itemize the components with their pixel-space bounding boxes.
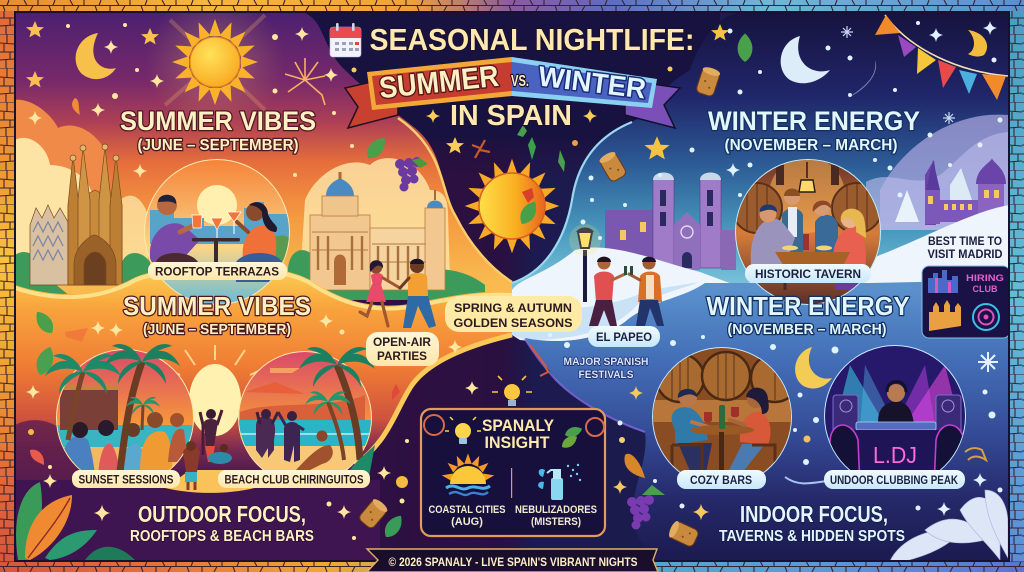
- label: undoor clubbing peak: [824, 470, 965, 489]
- sun: summer sky: [172, 19, 258, 105]
- label: beach club chiringuitos: [218, 470, 370, 488]
- text: best time to visit madrid: VISIT MADRID: [928, 249, 1002, 261]
- icon: insight bulb: [445, 417, 481, 444]
- big leaves: winter corner: [890, 490, 1008, 561]
- title: IN SPAIN: [450, 100, 572, 132]
- heading: summer vibes lower: (JUNE – SEPTEMBER): [143, 321, 291, 338]
- label: cozy bars: [677, 470, 766, 489]
- bunting: [875, 15, 1008, 100]
- snowflakes: [841, 26, 998, 372]
- lamp post: [569, 224, 601, 302]
- text: outdoor focus: [130, 501, 314, 545]
- moon: summer sky: [76, 33, 116, 79]
- label: spring and autumn golden seasons: GOLDEN SEASONS: [454, 318, 573, 330]
- landmark: Sagrada Familia: [30, 144, 122, 285]
- label: major spanish festivals: FESTIVALS: [578, 369, 634, 381]
- panel: summer upper sky: [15, 0, 512, 300]
- panel: summer lower area: [15, 265, 512, 561]
- text: indoor focus: [719, 501, 905, 545]
- central half-sun: [465, 159, 559, 253]
- heading: winter energy lower: (NOVEMBER – MARCH): [728, 321, 887, 338]
- grapes and leaf: summer: [363, 134, 428, 192]
- heading: winter energy top: [708, 106, 920, 154]
- text: indoor focus: TAVERNS & HIDDEN SPOTS: [719, 528, 905, 545]
- text: coastal cities: COASTAL CITIES: [428, 504, 506, 516]
- heading: winter energy top: WINTER ENERGY: [708, 106, 920, 136]
- title: [370, 22, 694, 132]
- label: major spanish festivals: [564, 356, 649, 381]
- panel: winter upper sky: [512, 13, 1010, 295]
- text: coastal cities: [428, 504, 506, 528]
- label: historic tavern: [745, 264, 871, 283]
- title: SEASONAL NIGHTLIFE:: [370, 22, 694, 57]
- fireworks: [285, 58, 325, 105]
- heading: winter energy lower: WINTER ENERGY: [706, 291, 910, 321]
- circle scene: indoor clubbing: [824, 345, 966, 470]
- text: indoor focus: INDOOR FOCUS,: [740, 501, 888, 527]
- label: spring and autumn golden seasons: [445, 296, 582, 332]
- divider line in box: [511, 468, 512, 498]
- text: best time to visit madrid: [928, 236, 1002, 261]
- palm trees: [45, 344, 375, 482]
- title sparkles: [352, 66, 672, 158]
- dancers: [360, 259, 436, 328]
- icon: sun over waves: [441, 453, 495, 495]
- circle scene: historic tavern: [732, 157, 882, 306]
- landmark: palace: [280, 172, 485, 300]
- label: rooftop terrazas: ROOFTOP TERRAZAS: [155, 266, 279, 278]
- icon: mister spray: [538, 464, 581, 500]
- heading: summer vibes top: (JUNE – SEPTEMBER): [138, 137, 298, 154]
- circle scene: rooftop terrazas: [144, 159, 295, 305]
- landmark: winter cathedral: [605, 172, 736, 270]
- label: spring and autumn golden seasons: SPRING & AUTUMN: [454, 303, 572, 315]
- calendar icon: [330, 23, 361, 57]
- label: el papeo: [588, 326, 660, 347]
- clouds: summer: [15, 100, 450, 280]
- label: open-air parties: OPEN-AIR: [373, 337, 432, 349]
- snow drifts: [512, 205, 1010, 342]
- bushes behind landmarks: [15, 250, 318, 296]
- label: sunset sessions: [72, 470, 180, 488]
- title: WINTER: [537, 61, 648, 105]
- heading: summer vibes lower: [123, 291, 311, 338]
- text: outdoor focus: ROOFTOPS & BEACH BARS: [130, 528, 314, 545]
- text: nebulizadores: NEBULIZADORES: [515, 504, 597, 516]
- heading: winter energy lower: [706, 291, 910, 338]
- panel: club card: HIRING: [966, 273, 1004, 284]
- decorations: lower summer: [26, 308, 479, 541]
- text: best time to visit madrid: BEST TIME TO: [928, 236, 1002, 248]
- heading: spanaly insight: [482, 417, 554, 452]
- heading: winter energy top: (NOVEMBER – MARCH): [724, 137, 898, 154]
- insight box: [421, 409, 605, 536]
- icon: light bulb above box: [492, 376, 532, 406]
- text: nebulizadores: (MISTERS): [531, 516, 581, 528]
- label: el papeo: EL PAPEO: [596, 332, 652, 344]
- text: outdoor focus: OUTDOOR FOCUS,: [138, 501, 306, 527]
- landmark: winter castle: [895, 158, 1006, 225]
- heading: summer vibes top: [120, 106, 316, 154]
- title: VS.: [511, 73, 529, 90]
- label: open-air parties: PARTIES: [377, 351, 427, 363]
- footer ribbon: [367, 549, 658, 572]
- label: beach club chiringuitos: BEACH CLUB CHIRINGUITOS: [224, 474, 364, 486]
- footer ribbon: © 2026 SPANALY - LIVE SPAIN'S VIBRANT NIGHTS: [388, 557, 638, 569]
- heading: summer vibes top: SUMMER VIBES: [120, 106, 316, 136]
- text: nebulizadores: [515, 504, 597, 528]
- circle scene: beach club chiringuitos: [238, 351, 372, 470]
- label: open-air parties: [366, 332, 439, 366]
- label: historic tavern: HISTORIC TAVERN: [755, 269, 861, 281]
- ribbon: summer: [345, 57, 512, 128]
- beach figures: [183, 409, 232, 490]
- circle scene: cozy bars: [652, 347, 792, 474]
- decorations: lower winter: [530, 333, 1002, 548]
- sky decorations: summer: [26, 21, 354, 178]
- panel: club card: CLUB: [972, 284, 998, 295]
- text: coastal cities: (AUG): [451, 516, 483, 528]
- heading: spanaly insight: SPANALY: [482, 417, 554, 435]
- heading: spanaly insight: INSIGHT: [484, 434, 550, 452]
- label: rooftop terrazas: [148, 262, 287, 280]
- friends toasting: [589, 256, 664, 326]
- panel: winter lower area: [525, 280, 1010, 561]
- icon: leaves in box: [559, 424, 584, 451]
- panel: club card: [922, 266, 1010, 338]
- ribbon: winter: [512, 57, 680, 128]
- circle scene: sunset sessions: [56, 349, 194, 470]
- big leaves: summer corner: [16, 482, 135, 560]
- label: cozy bars: COZY BARS: [690, 475, 752, 487]
- label: undoor clubbing peak: UNDOOR CLUBBING PEAK: [830, 475, 959, 487]
- sky decorations: winter: [517, 21, 1002, 240]
- label: sunset sessions: SUNSET SESSIONS: [78, 474, 174, 486]
- label: major spanish festivals: MAJOR SPANISH: [564, 356, 649, 368]
- neon sign: L.DJ: [873, 442, 917, 468]
- title: SUMMER: [378, 60, 501, 105]
- heading: summer vibes lower: SUMMER VIBES: [123, 291, 311, 321]
